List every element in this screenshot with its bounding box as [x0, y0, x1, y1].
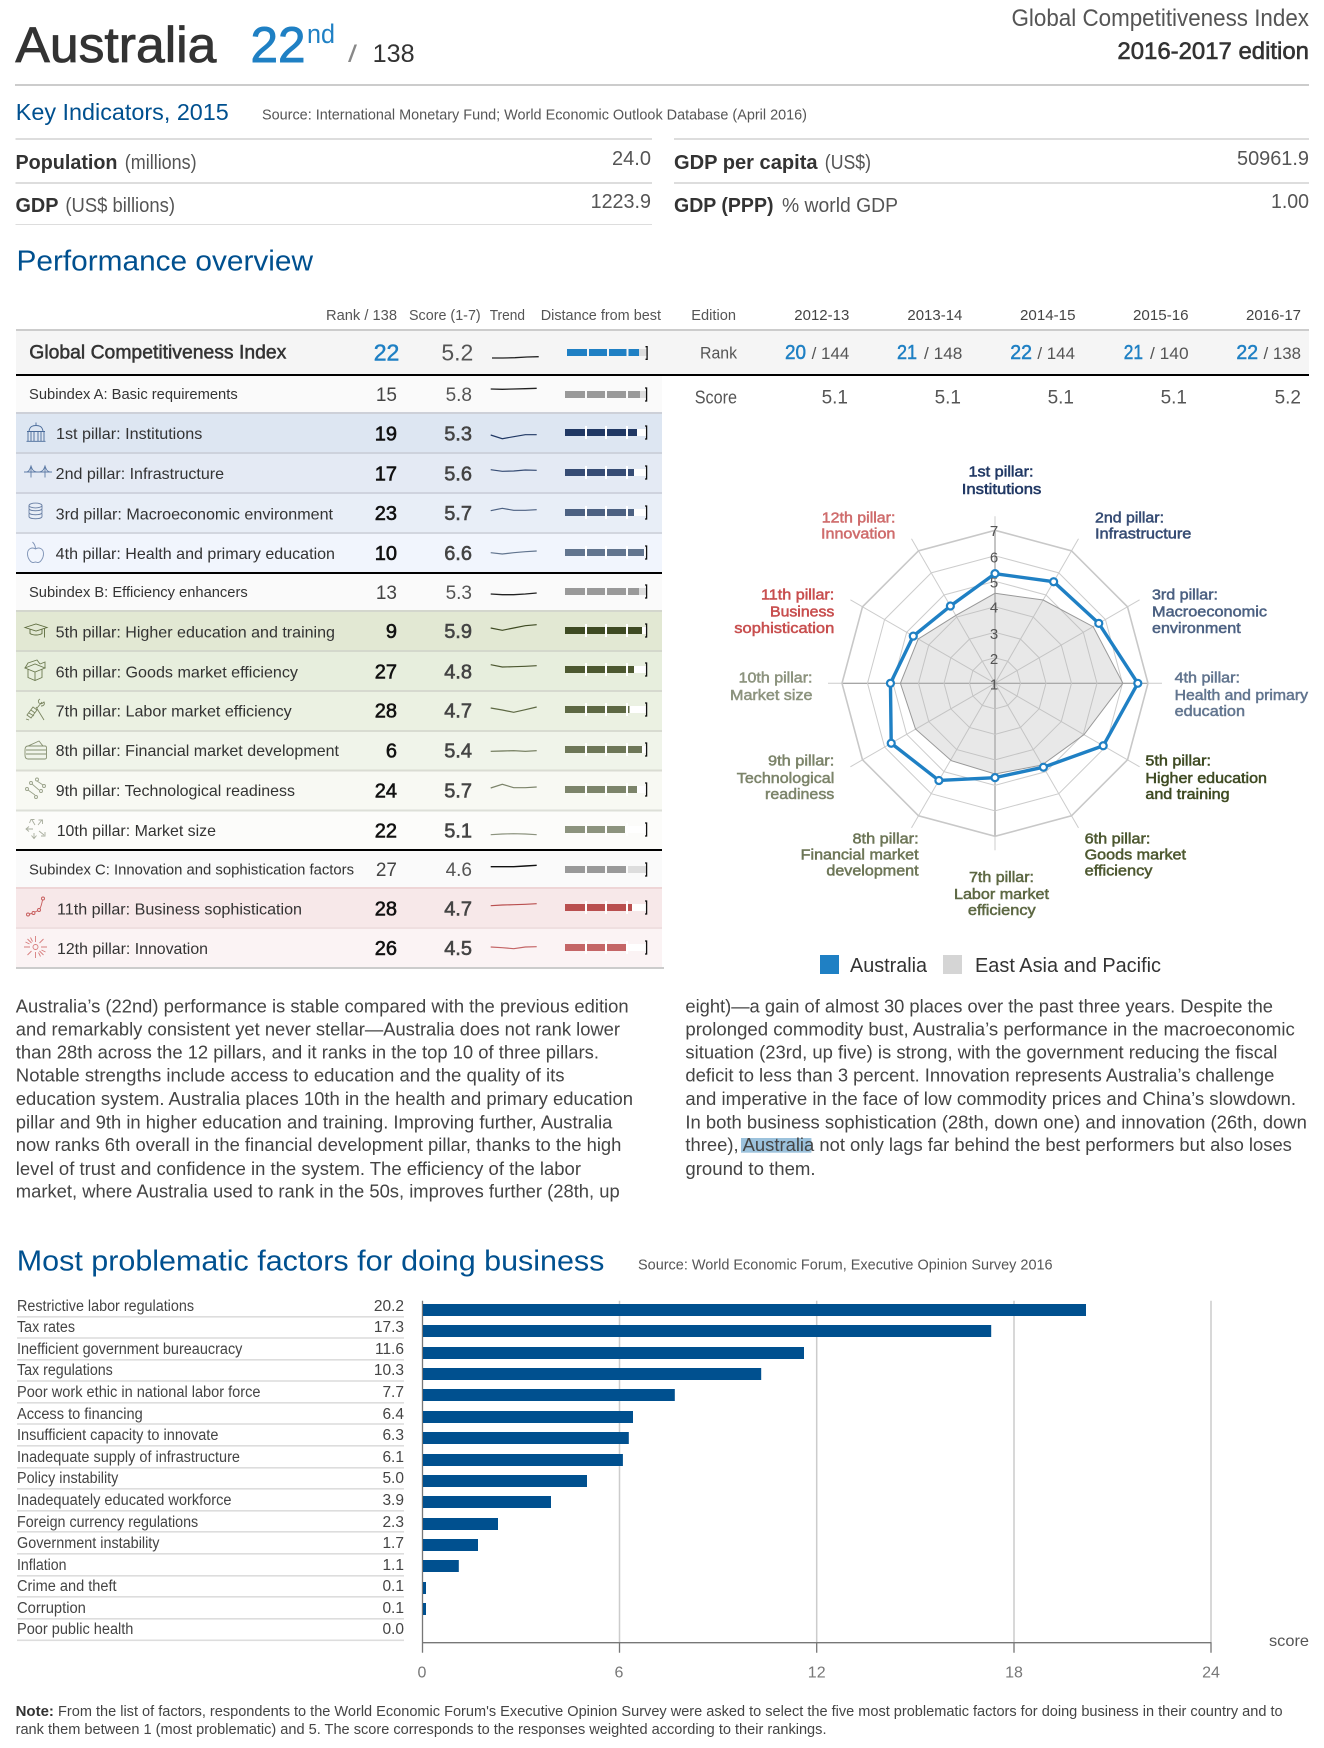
row: subindex C [16, 851, 662, 889]
panel: factors list: Policy instability [17, 1470, 119, 1487]
rank by edition: Rank [700, 343, 737, 362]
radar label: 11th pillar: 11th pillar: [761, 588, 834, 604]
row: 12th pillar [16, 929, 662, 967]
radar scale numbers: 7 [990, 523, 998, 540]
radar scale numbers: 5 [990, 575, 998, 592]
text block: commentary left column [16, 996, 633, 1202]
text block: commentary left column: market, where Australia used to rank in the 50s, improves further (28th, up [16, 1182, 620, 1202]
panel: factors list: Crime and theft [17, 1578, 117, 1595]
panel: edition history [691, 307, 1301, 408]
radar grid [828, 516, 1162, 850]
row: 2nd pillar: 17 [375, 464, 397, 486]
radar label: 10th pillar [730, 671, 812, 704]
text block: commentary right column: In both business sophistication (28th, down one) and innovation (26th, down [685, 1112, 1307, 1132]
row: Global Competitiveness Index: 5.2 [441, 340, 473, 366]
indicator: population: Population [16, 152, 118, 174]
row: 3rd pillar: 5.7 [444, 503, 472, 525]
row: 2nd pillar: 5.6 [444, 464, 472, 486]
chart: radar of 12 pillars [730, 465, 1309, 977]
score by edition: Score [695, 387, 737, 407]
radar label: 12th pillar: 12th pillar: [822, 511, 895, 527]
indicator: GDP PPP: % world GDP [782, 195, 898, 217]
radar label: 7th pillar: Labor market [954, 887, 1049, 903]
row: 10th pillar: 5.1 [444, 821, 472, 843]
text block: commentary right column: prolonged commodity bust, Australia’s performance in the macroeconomic [685, 1020, 1295, 1040]
text block: commentary left column: Notable strengths include access to education and the quality of its [16, 1066, 565, 1086]
bar chart grid and axis [422, 1301, 1212, 1653]
score by edition: 5.1 [935, 387, 961, 408]
panel: factors list: 11.6 [375, 1341, 404, 1358]
score by edition [695, 387, 1301, 408]
radar label: 8th pillar [801, 832, 919, 880]
indicator: population: (millions) [125, 152, 197, 174]
text block: commentary right column: three), Australia not only lags far behind the best performers but also loses [685, 1135, 1292, 1155]
row: 9th pillar: 5.7 [444, 781, 472, 803]
indicator: GDP per capita: GDP per capita [674, 152, 818, 174]
row: 8th pillar: 6 [386, 741, 397, 763]
icon: coin stack [29, 503, 42, 519]
panel: factors list: Access to financing [17, 1406, 143, 1423]
radar label: 8th pillar: 8th pillar: [852, 832, 919, 848]
panel: factors list: Foreign currency regulations [17, 1514, 198, 1531]
row: subindex C: 27 [376, 860, 397, 881]
icon: stacked notes [25, 741, 46, 759]
score by edition: 5.2 [1275, 387, 1301, 408]
panel: factors list: Tax regulations [17, 1362, 113, 1379]
panel: factors list: Inadequate supply of infrastructure [17, 1449, 240, 1466]
radar label: 10th pillar: 10th pillar: [739, 671, 812, 687]
indicator: GDP [16, 191, 651, 217]
indicator: GDP: 1223.9 [591, 191, 651, 213]
row: 1st pillar [16, 414, 662, 454]
panel: factors list: Poor work ethic in national labor force [17, 1384, 260, 1401]
row: subindex C: Subindex C: Innovation and sophistication factors [29, 862, 354, 878]
axis tick labels [418, 1665, 1220, 1682]
chart: factor scores bar chart [418, 1301, 1309, 1682]
radar label: 12th pillar: Innovation [821, 527, 895, 543]
row: 3rd pillar: 3rd pillar: Macroeconomic environment [56, 506, 334, 523]
radar label: 6th pillar: 6th pillar: [1085, 832, 1150, 848]
row: 8th pillar: 8th pillar: Financial market development [56, 743, 340, 760]
axis title: score [1269, 1633, 1309, 1650]
table column headers: Distance from best [541, 307, 662, 324]
indicator: GDP PPP [674, 191, 1309, 217]
text block: commentary right column: eight)—a gain of almost 30 places over the past three years. Despite the [685, 996, 1273, 1016]
row: 5th pillar: 5th pillar: Higher education and training [56, 624, 335, 641]
icon: rising nodes [26, 897, 44, 916]
indicator: GDP PPP: GDP (PPP) [674, 195, 774, 217]
heading: most problematic factors: Most problematic factors for doing business [17, 1246, 604, 1278]
row: 3rd pillar: 23 [375, 503, 397, 525]
axis tick labels: 18 [1005, 1665, 1023, 1682]
indicator: GDP per capita: 50961.9 [1237, 148, 1309, 170]
text block: commentary right column: ground to them. [685, 1159, 816, 1179]
note: rank them between 1 (most problematic) and 5. The score corresponds to the responses weighted according to their rankings. [16, 1721, 827, 1738]
indicator: GDP PPP: 1.00 [1271, 191, 1309, 213]
note: From the list of factors, respondents to the World Economic Forum's Executive Opinion Survey were asked to select the five most problematic factors for doing business in their country and to [58, 1703, 1283, 1720]
edition header row: 2016-17 [1246, 307, 1301, 324]
source note: Source: International Monetary Fund; World Economic Outlook Database (April 2016) [262, 106, 807, 123]
row: 4th pillar: 6.6 [444, 543, 472, 565]
row: 10th pillar: 10th pillar: Market size [57, 823, 216, 840]
indicator: population: 24.0 [612, 148, 651, 170]
row: 11th pillar: 11th pillar: Business sophistication [57, 901, 302, 918]
row: 9th pillar [16, 772, 662, 812]
row: 7th pillar [16, 692, 662, 732]
edition header row: 2013-14 [907, 307, 962, 324]
indicator: GDP per capita: (US$) [825, 152, 871, 174]
heading: performance overview: Performance overview [16, 246, 314, 278]
icon: expanding arrows [26, 820, 45, 838]
icon: innovation burst [24, 936, 47, 958]
row: 12th pillar: 4.5 [444, 938, 472, 960]
radar label: 3rd pillar: environment [1152, 621, 1241, 637]
radar label: 1st pillar [962, 465, 1041, 498]
series: East Asia and Pacific [900, 593, 1123, 774]
row: subindex A: 15 [376, 385, 397, 406]
radar label: 4th pillar [1175, 671, 1309, 720]
row: 8th pillar [16, 732, 662, 772]
edition header row: 2014-15 [1020, 307, 1076, 324]
text block: commentary right column: deficit to less than 3 percent. Innovation represents Australia’s challenge [685, 1066, 1274, 1086]
radar label: 6th pillar: efficiency [1085, 864, 1153, 880]
text block: commentary right column: and imperative in the face of low commodity prices and China’s slowdown. [685, 1089, 1296, 1109]
radar label: 7th pillar [954, 870, 1049, 919]
row: subindex B [16, 574, 662, 612]
note [16, 1703, 1283, 1738]
title: Australia: Australia [15, 17, 217, 73]
panel: pillar table [16, 307, 1309, 969]
row: 10th pillar [16, 812, 662, 849]
row: 7th pillar: 7th pillar: Labor market efficiency [56, 704, 292, 721]
radar label: 4th pillar: Health and primary [1175, 688, 1309, 704]
radar label: 1st pillar: 1st pillar: [968, 465, 1034, 481]
note: Note: [16, 1703, 54, 1720]
row: Global Competitiveness Index: 22 [374, 340, 399, 366]
row: 2nd pillar [16, 454, 662, 494]
panel: factors list: 6.3 [382, 1427, 404, 1444]
row: 7th pillar: 4.7 [444, 701, 472, 723]
row: 9th pillar: 24 [375, 781, 397, 803]
rank by edition: 22 [1010, 342, 1032, 364]
radar label: 9th pillar: readiness [765, 787, 834, 803]
rank by edition: 21 [1124, 342, 1143, 364]
panel: factors list [17, 1298, 404, 1641]
text block: commentary left column: now ranks 6th overall in the financial development pillar, thanks to the high [16, 1135, 621, 1155]
row: 4th pillar: 4th pillar: Health and primary education [56, 546, 335, 563]
panel: factors list: Inefficient government bureaucracy [17, 1341, 243, 1358]
radar label: 3rd pillar: 3rd pillar: [1152, 588, 1218, 604]
rank by edition [700, 342, 1301, 364]
series: Australia [887, 570, 1141, 784]
radar label: 3rd pillar: Macroeconomic [1152, 605, 1267, 621]
radar label: 12th pillar [821, 511, 895, 543]
radar legend [820, 955, 1161, 977]
table column headers [326, 307, 662, 324]
text block: commentary right column [685, 996, 1307, 1179]
text block: commentary left column: Australia’s (22nd) performance is stable compared with the previous edition [16, 996, 629, 1016]
text block: commentary left column: education system. Australia places 10th in the health and primary education [16, 1089, 633, 1109]
score by edition: 5.1 [1048, 387, 1074, 408]
row: 9th pillar: 9th pillar: Technological readiness [56, 783, 295, 800]
rank by edition: / 144 [812, 344, 849, 363]
row: subindex C: 4.6 [446, 860, 472, 881]
radar label: 4th pillar: education [1175, 704, 1245, 720]
report name: Global Competitiveness Index [1012, 5, 1309, 32]
row: subindex B: 5.3 [446, 583, 472, 604]
row: 3rd pillar [16, 494, 662, 534]
edition header row: 2012-13 [794, 307, 849, 324]
table column headers: Score (1-7) [409, 307, 481, 324]
row: 1st pillar: 19 [375, 424, 397, 446]
row: 8th pillar: 5.4 [444, 741, 472, 763]
score by edition: 5.1 [1161, 387, 1187, 408]
radar label: 9th pillar [737, 754, 834, 803]
radar label: 7th pillar: efficiency [968, 903, 1037, 919]
radar label: 9th pillar: 9th pillar: [768, 754, 834, 770]
row: 11th pillar: 4.7 [444, 899, 472, 921]
table column headers: Rank / 138 [326, 307, 397, 324]
edition header row: Edition [691, 307, 736, 324]
indicator: GDP: GDP [16, 195, 58, 217]
axis tick labels: 6 [615, 1665, 624, 1682]
row: 6th pillar: 4.8 [444, 661, 472, 683]
axis tick labels: 0 [418, 1665, 427, 1682]
axis tick labels: 24 [1202, 1665, 1220, 1682]
source note: executive survey: Source: World Economic Forum, Executive Opinion Survey 2016 [638, 1256, 1053, 1273]
row: Global Competitiveness Index: Global Competitiveness Index [29, 342, 287, 363]
row: 2nd pillar: 2nd pillar: Infrastructure [56, 466, 224, 483]
panel: factors list: 0.1 [382, 1600, 404, 1617]
panel: factors list: 17.3 [374, 1319, 404, 1336]
radar label: 2nd pillar: 2nd pillar: [1095, 511, 1164, 527]
row: subindex A: Subindex A: Basic requirements [29, 387, 238, 403]
header: country, rank and edition [15, 5, 1309, 73]
icon: apple [28, 542, 44, 562]
overall rank: 22nd of 138: / [348, 41, 357, 68]
panel: key indicators [16, 99, 1309, 225]
radar label: 7th pillar: 7th pillar: [969, 870, 1034, 886]
radar label: 1st pillar: Institutions [962, 482, 1041, 498]
row: 1st pillar: 5.3 [444, 424, 472, 446]
radar label: 5th pillar: Higher education [1145, 771, 1267, 787]
overall rank: 22nd of 138 [250, 17, 415, 73]
radar legend: East Asia and Pacific [975, 955, 1161, 977]
panel: factors list: 1.7 [382, 1535, 404, 1552]
panel: factors list: Restrictive labor regulations [17, 1298, 194, 1315]
row: subindex A: 5.8 [446, 385, 472, 406]
axis tick labels: 12 [808, 1665, 826, 1682]
rank by edition: / 148 [924, 344, 962, 363]
radar scale numbers: 6 [990, 550, 998, 567]
row: 5th pillar [16, 612, 662, 652]
icon: circuit [26, 778, 46, 798]
edition header row: 2015-16 [1133, 307, 1189, 324]
row: Global Competitiveness Index [29, 340, 647, 366]
rank by edition: 20 [785, 342, 806, 364]
panel: factors list: 1.1 [382, 1557, 404, 1574]
radar label: 6th pillar [1085, 832, 1186, 880]
rank by edition: / 140 [1150, 344, 1189, 363]
rank by edition: 21 [897, 342, 917, 364]
radar label: 2nd pillar: Infrastructure [1095, 527, 1191, 543]
icon: box [25, 660, 45, 680]
panel: factors list: Tax rates [17, 1319, 75, 1336]
icon: institution building [26, 422, 46, 441]
overall rank: 22nd of 138: 22 [250, 17, 306, 73]
panel: factors list: 5.0 [382, 1470, 404, 1487]
radar label: 11th pillar [734, 588, 834, 637]
radar scale numbers: 3 [990, 626, 998, 643]
row: 5th pillar: 5.9 [444, 621, 472, 643]
row: 10th pillar: 22 [375, 821, 397, 843]
indicator: GDP per capita [674, 148, 1309, 174]
edition header row [691, 307, 1301, 324]
panel: factors list: Insufficient capacity to innovate [17, 1427, 218, 1444]
panel: factors list: Inadequately educated workforce [17, 1492, 232, 1509]
panel: factors list: 10.3 [374, 1362, 404, 1379]
row: 6th pillar: 6th pillar: Goods market efficiency [56, 664, 298, 681]
panel: factors list: 2.3 [382, 1514, 404, 1531]
icon: bridge [24, 466, 52, 478]
panel: factors list: Corruption [17, 1600, 86, 1617]
text block: commentary right column: situation (23rd, up five) is strong, with the government reducing the fiscal [685, 1042, 1277, 1062]
rank by edition: / 138 [1264, 344, 1301, 363]
radar label: 11th pillar: Business [770, 605, 834, 621]
row: 4th pillar: 10 [375, 543, 397, 565]
icon: graduation cap [25, 624, 47, 638]
row: subindex B: 13 [376, 583, 397, 604]
radar scale numbers: 1 [990, 676, 998, 693]
edition: 2016-2017 edition [1117, 38, 1309, 65]
row: 7th pillar: 28 [375, 701, 397, 723]
panel: factors list: 0.1 [382, 1578, 404, 1595]
radar label: 10th pillar: Market size [730, 688, 812, 704]
table column headers: Trend [490, 307, 525, 324]
radar label: 8th pillar: development [826, 864, 919, 880]
row: 6th pillar [16, 652, 662, 692]
radar label: 11th pillar: sophistication [734, 621, 834, 637]
indicator: GDP: (US$ billions) [65, 195, 175, 217]
row: 1st pillar: 1st pillar: Institutions [56, 426, 202, 443]
icon: tools [26, 699, 44, 720]
text block: commentary left column: and remarkably consistent yet never stellar—Australia does not rank lower [16, 1020, 620, 1040]
score by edition: 5.1 [822, 387, 848, 408]
heading: key indicators: Key Indicators, 2015 [16, 99, 229, 125]
row: subindex A [16, 376, 662, 414]
radar scale numbers: 4 [990, 599, 998, 616]
row: 4th pillar [16, 534, 662, 572]
row: 6th pillar: 27 [375, 661, 397, 683]
rank by edition: 22 [1236, 342, 1258, 364]
radar label: 6th pillar: Goods market [1085, 848, 1186, 864]
radar label: 5th pillar: and training [1145, 787, 1230, 803]
panel: factors list: Inflation [17, 1557, 66, 1574]
radar label: 4th pillar: 4th pillar: [1175, 671, 1240, 687]
radar scale numbers [990, 523, 998, 693]
panel: factors list: 0.0 [382, 1621, 404, 1638]
radar label: 2nd pillar [1095, 511, 1191, 543]
panel: factors list: Poor public health [17, 1621, 133, 1638]
text block: commentary left column: level of trust and confidence in the system. The efficiency of the labor [16, 1159, 581, 1179]
row: 11th pillar: 28 [375, 899, 397, 921]
panel: factors list: 6.4 [382, 1406, 404, 1423]
text block: commentary left column: pillar and 9th in higher education and training. Improving further, Australia [16, 1112, 613, 1132]
radar label: 9th pillar: Technological [737, 771, 834, 787]
rank by edition: / 144 [1037, 344, 1075, 363]
panel: factors list: 6.1 [382, 1449, 404, 1466]
row: 11th pillar [16, 889, 662, 929]
panel: factors list: 3.9 [382, 1492, 404, 1509]
row: 5th pillar: 9 [386, 621, 397, 643]
overall rank: 22nd of 138: nd [307, 19, 335, 49]
indicator: population [16, 148, 651, 174]
radar label: 3rd pillar [1152, 588, 1267, 637]
bars [423, 1304, 1086, 1615]
text block: commentary left column: than 28th across the 12 pillars, and it ranks in the top 10 of three pillars. [16, 1042, 599, 1062]
radar label: 8th pillar: Financial market [801, 848, 919, 864]
panel: factors list: 7.7 [382, 1384, 404, 1401]
radar label: 5th pillar: 5th pillar: [1145, 754, 1211, 770]
radar scale numbers: 2 [990, 651, 998, 668]
row: subindex B: Subindex B: Efficiency enhancers [29, 585, 248, 601]
panel: factors list: Government instability [17, 1535, 160, 1552]
panel: factors list: 20.2 [374, 1298, 404, 1315]
overall rank: 22nd of 138: 138 [373, 40, 415, 68]
radar legend: Australia [850, 955, 928, 977]
row: 12th pillar: 26 [375, 938, 397, 960]
row: 12th pillar: 12th pillar: Innovation [57, 941, 208, 958]
radar label: 5th pillar [1145, 754, 1267, 803]
